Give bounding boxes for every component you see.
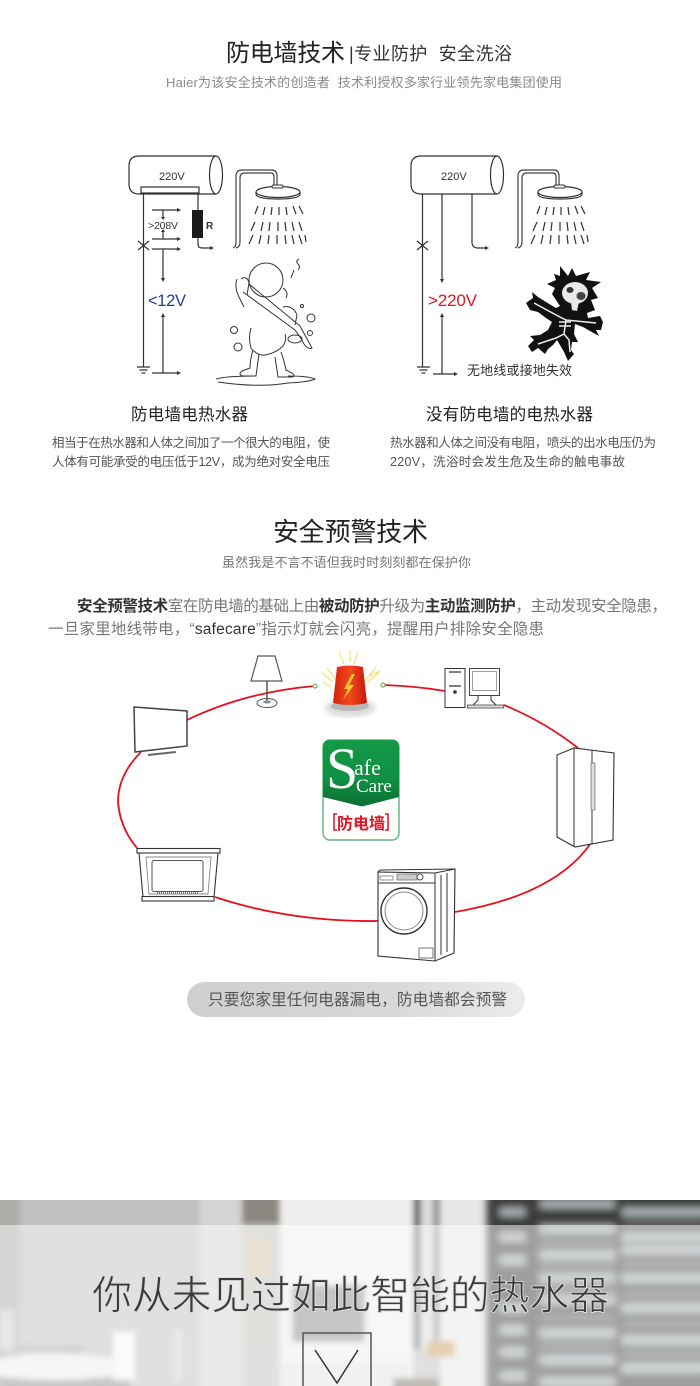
badge: SafeCare: 防电墙 <box>337 814 385 833</box>
icon: tank: 220V <box>159 171 185 183</box>
paragraph: 一旦家里地线带电，“safecare”指示灯就会闪亮，提醒用户排除安全隐患 <box>48 620 544 638</box>
icon: washing machine <box>378 869 455 961</box>
subheading: 虽然我是不言不语但我时时刻刻都在保护你 <box>222 555 471 570</box>
circuit <box>137 193 186 375</box>
icon: shower <box>515 170 588 248</box>
caption: firewall heater: 人体有可能承受的电压低于12V，成为绝对安全电压 <box>52 454 330 469</box>
title: 防电墙技术 <box>226 40 512 67</box>
icon: TV <box>134 707 187 755</box>
caption: heater without firewall: 热水器和人体之间没有电阻，喷头的出水电压仍为 <box>390 435 656 450</box>
caption: firewall heater: 防电墙电热水器 <box>131 405 248 424</box>
icon: tank: 220V <box>441 171 467 183</box>
circuit <box>417 194 489 376</box>
paragraph: 安全预警技术室在防电墙的基础上由被动防护升级为主动监测防护，主动发现安全隐患， <box>77 596 667 615</box>
icon: down chevron box <box>303 1333 371 1386</box>
caption: firewall heater <box>52 405 330 469</box>
red circuit ring <box>118 683 591 921</box>
icon: electrocuted skeleton <box>526 266 603 361</box>
title: 防电墙技术: 防电墙技术 <box>226 40 345 67</box>
diagram: water heater without firewall <box>411 156 603 378</box>
badge: SafeCare: Care <box>356 776 392 797</box>
badge: SafeCare <box>323 736 399 840</box>
banner headline: 你从未见过如此智能的热水器 <box>92 1274 609 1318</box>
callout pill: 只要您家里任何电器漏电，防电墙都会预警 <box>208 991 507 1009</box>
icon: tank <box>129 156 222 194</box>
icon: computer <box>445 668 504 708</box>
badge: SafeCare: afe <box>354 755 381 780</box>
badge: SafeCare: S <box>326 736 358 801</box>
icon: tank <box>411 156 504 194</box>
subtitle: Haier为该安全技术的创造者 技术利授权多家行业领先家电集团使用 <box>166 75 562 90</box>
diagram: water heater with firewall <box>129 156 315 385</box>
circuit: >220V <box>428 291 478 310</box>
icon: person bathing <box>216 259 315 385</box>
icon: shower <box>233 170 306 248</box>
circuit: >208V <box>148 220 178 232</box>
circuit: <12V <box>148 292 186 310</box>
title: 防电墙技术: |专业防护 安全洗浴 <box>349 44 512 64</box>
icon: resistor: R <box>206 221 214 232</box>
caption: heater without firewall: 220V，洗浴时会发生危及生命的触电事故 <box>390 454 625 469</box>
caption: heater without firewall: 没有防电墙的电热水器 <box>426 405 594 424</box>
callout pill <box>187 982 525 1017</box>
caption: heater without firewall <box>390 405 656 469</box>
icon: fridge <box>557 748 614 847</box>
icon: resistor <box>192 193 214 250</box>
paragraph <box>48 596 667 638</box>
icon: lamp <box>251 656 282 708</box>
icon: siren <box>322 650 380 717</box>
label: no ground wire: 无地线或接地失效 <box>467 363 572 378</box>
icon: range hood <box>137 848 220 901</box>
caption: firewall heater: 相当于在热水器和人体之间加了一个很大的电阻，使 <box>52 435 330 450</box>
photo banner <box>0 1190 700 1386</box>
heading: safety warning: 安全预警技术 <box>273 517 428 547</box>
